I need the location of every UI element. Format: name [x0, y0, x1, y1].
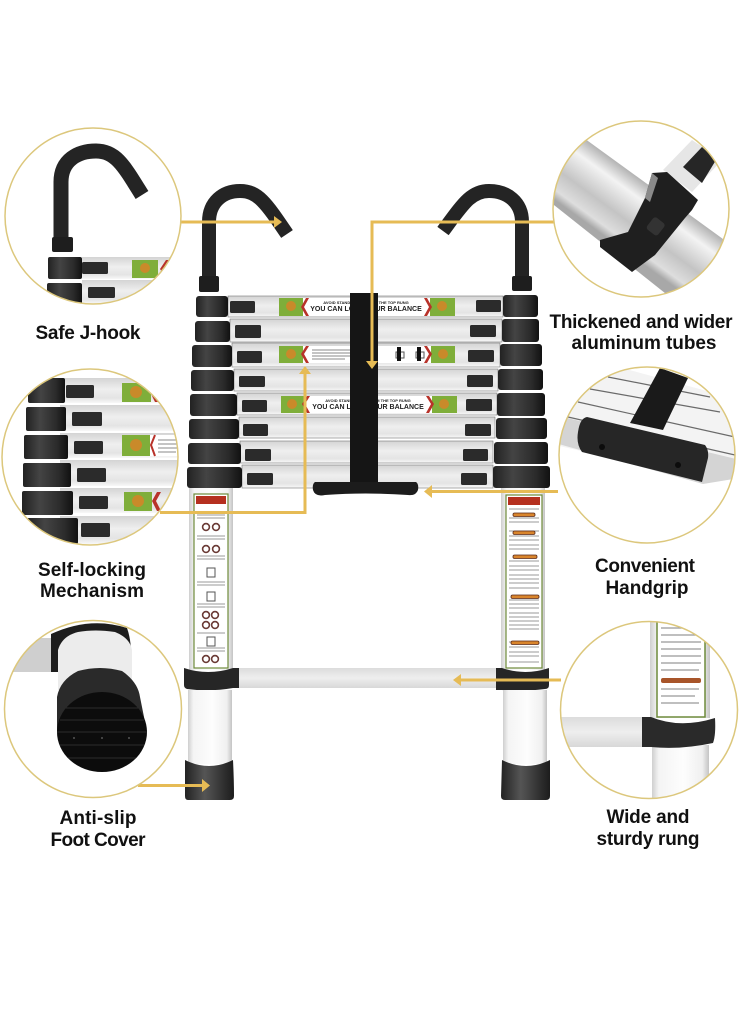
connector: rung	[453, 674, 561, 686]
panel: aluminum tubes	[554, 140, 723, 293]
label: Convenient Handgrip: Convenient	[595, 556, 696, 577]
right foot cover	[501, 760, 550, 800]
lower warning sticker	[281, 396, 457, 413]
rung latches	[230, 300, 501, 485]
circle outline: rung	[560, 622, 738, 798]
panel: wide and sturdy rung	[562, 622, 716, 798]
circle outline: self-locking	[2, 369, 178, 545]
top warning sticker	[279, 298, 455, 316]
icon: foot close-up	[0, 623, 147, 772]
label: Wide and sturdy rung	[596, 807, 700, 850]
label: Self-locking Mechanism: Self-locking	[38, 560, 146, 581]
panel: self-locking mechanism	[22, 378, 177, 544]
label: Thickened and wider aluminum tubes: aluminum tubes	[572, 333, 716, 354]
lower warning sticker: YOU CAN LOSE YOUR BALANCE	[312, 404, 424, 411]
bottom rung	[239, 668, 496, 688]
left hook	[199, 191, 287, 292]
left rung collar	[184, 668, 239, 690]
circle outline: foot cover	[4, 620, 182, 798]
connector: J-hook	[181, 216, 282, 228]
label: Convenient Handgrip: Handgrip	[606, 578, 688, 599]
label: Convenient Handgrip	[595, 556, 696, 599]
right collars	[493, 295, 550, 488]
icon: hook close-up	[47, 144, 170, 303]
strap and handgrip	[313, 293, 418, 495]
left collars	[187, 296, 242, 488]
connector: handgrip	[424, 485, 558, 498]
label: Wide and sturdy rung: sturdy rung	[596, 829, 700, 850]
label: Anti-slip Foot Cover: Anti-slip	[60, 808, 136, 829]
label: Thickened and wider aluminum tubes: Thickened and wider	[550, 312, 733, 333]
label: Thickened and wider aluminum tubes	[550, 312, 733, 354]
top warning sticker: AVOID STAND OR SIT FROM THE TOP RUNG	[323, 300, 409, 305]
label: Self-locking Mechanism	[38, 560, 146, 602]
connector: foot cover	[138, 779, 210, 792]
right lowest tube	[503, 690, 547, 764]
label: Anti-slip Foot Cover: Foot Cover	[50, 830, 146, 851]
left foot cover	[185, 760, 234, 800]
left lowest tube	[188, 690, 232, 764]
top warning sticker: YOU CAN LOSE YOUR BALANCE	[310, 306, 422, 313]
icon: rung close-up	[555, 618, 715, 803]
circle outline: tubes	[553, 121, 729, 297]
circle outline: handgrip	[559, 367, 735, 543]
icon: handgrip close-up	[560, 368, 734, 484]
connector: aluminum tubes	[366, 222, 555, 369]
rungs	[228, 296, 503, 488]
label: Self-locking Mechanism: Mechanism	[40, 581, 144, 602]
label: Safe J-hook: Safe J-hook	[36, 323, 141, 344]
icon: tube close-up	[554, 140, 723, 293]
right lower tube with safety label	[501, 488, 545, 670]
middle instruction sticker	[279, 346, 455, 363]
right rung collar	[496, 668, 549, 691]
label: Wide and sturdy rung: Wide and	[606, 807, 690, 828]
connector: self-locking mechanism	[160, 366, 311, 512]
telescopic ladder	[184, 191, 550, 800]
lower warning sticker: AVOID STAND OR SIT FROM THE TOP RUNG	[325, 398, 411, 403]
right hook	[443, 191, 532, 291]
panel: safe J-hook	[47, 144, 170, 303]
label: Anti-slip Foot Cover	[50, 808, 146, 851]
circle outline: J-hook	[5, 128, 181, 304]
panel: anti-slip foot cover	[14, 623, 147, 784]
panel: convenient handgrip	[560, 368, 734, 484]
icon: locks close-up	[22, 378, 180, 544]
left lower tube with safety label	[189, 488, 233, 670]
